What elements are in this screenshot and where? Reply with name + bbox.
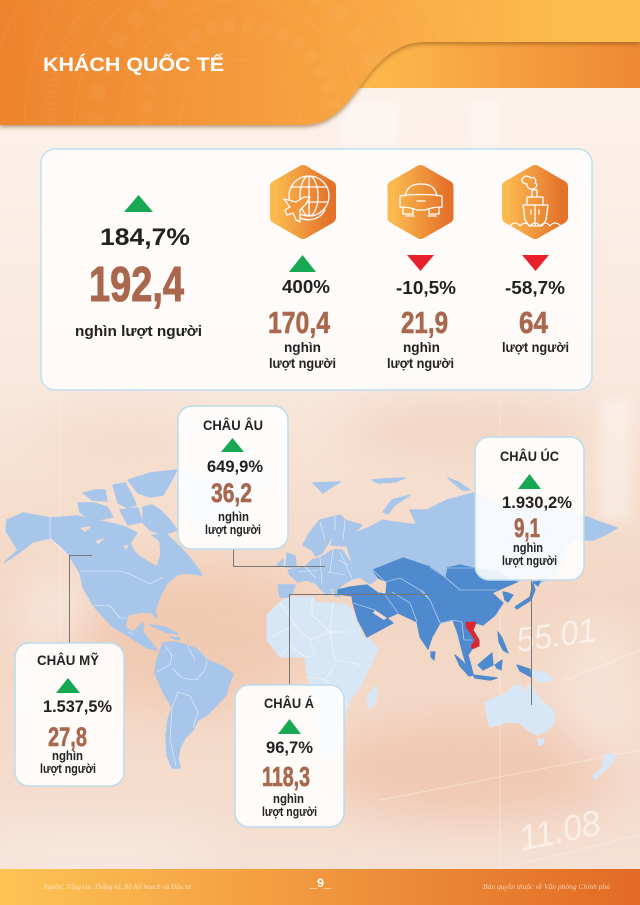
total: nghìn lượt người — [75, 323, 202, 340]
card: Oceania: 9,1 — [514, 513, 540, 543]
road travel: 21,9 — [401, 305, 448, 340]
map: South America — [155, 642, 233, 768]
icon: up arrow — [289, 255, 316, 272]
map: Arctic islands — [313, 478, 470, 514]
icon: up arrow — [221, 438, 244, 452]
card: Asia: nghìn — [273, 792, 304, 806]
air travel: 400% — [282, 277, 330, 297]
map: Africa — [267, 597, 378, 762]
icon: up arrow — [278, 719, 301, 734]
card: Americas: lượt người — [40, 762, 96, 776]
air travel — [268, 171, 336, 371]
connector: Oceania — [530, 580, 532, 705]
copyright note: Bản quyền thuộc về Văn phòng Chính phủ — [483, 882, 610, 891]
card: Europe: lượt người — [205, 523, 261, 537]
header band — [340, 42, 640, 88]
card: Oceania — [475, 437, 584, 580]
card: Oceania: 1.930,2% — [502, 494, 572, 512]
air travel: lượt người — [269, 355, 336, 371]
card: Oceania: nghìn — [513, 541, 543, 555]
total: 192,4 — [89, 258, 184, 312]
card: Europe: 649,9% — [207, 458, 263, 476]
total — [75, 195, 202, 340]
footer — [0, 869, 640, 905]
card: Europe — [178, 406, 288, 549]
icon: down arrow — [407, 255, 434, 271]
sea travel: lượt người — [502, 339, 569, 355]
map: Europe — [277, 515, 362, 597]
map: Australia and New Zealand — [485, 670, 615, 780]
map: Greenland — [178, 472, 270, 540]
map: North America — [5, 470, 202, 650]
world map — [5, 470, 617, 780]
total: 184,7% — [100, 224, 190, 251]
icon: ship — [508, 171, 562, 233]
air travel: 170,4 — [268, 305, 331, 340]
map: Russia — [345, 493, 617, 584]
air travel: nghìn — [284, 339, 321, 355]
card: Asia: CHÂU Á — [264, 696, 314, 711]
icon: up arrow — [56, 678, 80, 693]
sea travel — [502, 171, 569, 355]
road travel: nghìn — [403, 339, 440, 355]
map: Madagascar — [367, 686, 378, 708]
card: Europe: nghìn — [218, 510, 249, 524]
background: 55.01 — [514, 611, 598, 660]
card: Oceania: lượt người — [502, 554, 557, 568]
map: islands, Japan and Korea — [431, 581, 540, 680]
card: Oceania: CHÂU ÚC — [500, 449, 559, 464]
card: Europe: 36,2 — [211, 478, 252, 508]
card: Americas: 1.537,5% — [43, 698, 112, 716]
road travel — [387, 171, 456, 371]
sea travel: 64 — [519, 305, 549, 340]
card: Americas: CHÂU MỸ — [37, 653, 99, 668]
background: 11.08 — [515, 802, 604, 859]
icon: up arrow — [124, 195, 153, 212]
panel: totals by transport — [41, 149, 592, 390]
header top — [0, 0, 640, 130]
card: Americas — [15, 643, 124, 786]
map: Vietnam — [466, 622, 479, 649]
card: Americas: nghìn — [52, 749, 83, 763]
icon: up arrow — [518, 474, 541, 489]
icon: plane and globe — [276, 171, 330, 233]
connector: Europe — [234, 549, 325, 566]
road travel: -10,5% — [396, 278, 456, 298]
card: Europe: CHÂU ÂU — [203, 418, 263, 433]
title: KHÁCH QUỐC TẾ — [43, 52, 224, 76]
connector: Americas — [70, 556, 92, 643]
icon: car — [394, 171, 448, 233]
card: Asia — [235, 685, 344, 827]
road travel: lượt người — [387, 355, 454, 371]
card: Asia: 96,7% — [266, 739, 313, 757]
source note: Nguồn: Tổng cục Thống kê, Bộ Kế hoạch và Đầu tư — [42, 882, 192, 891]
sea travel: -58,7% — [505, 278, 565, 298]
connector: Asia — [290, 594, 430, 685]
card: Asia: lượt người — [262, 805, 317, 819]
icon: down arrow — [522, 255, 549, 271]
page number: _9_ — [309, 876, 331, 890]
map: Central, South and Southeast Asia — [338, 558, 517, 674]
header — [0, 0, 640, 130]
card: Asia: 118,3 — [262, 761, 310, 792]
card: Americas: 27,8 — [48, 722, 87, 752]
